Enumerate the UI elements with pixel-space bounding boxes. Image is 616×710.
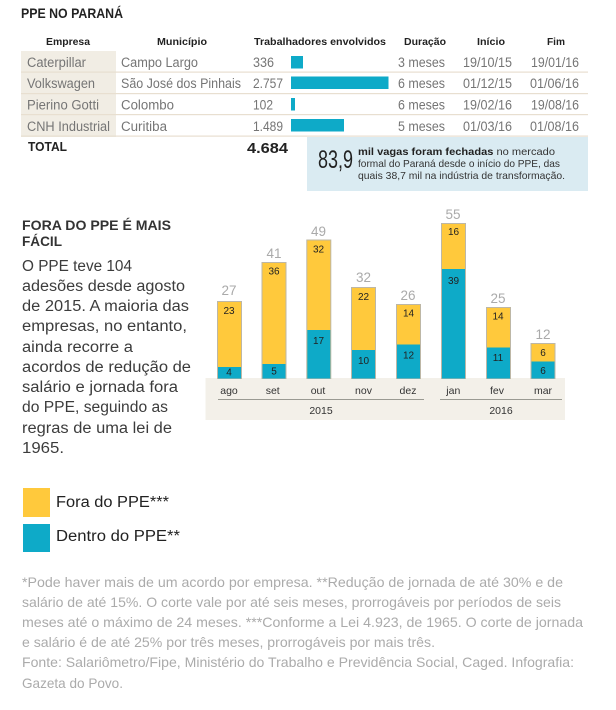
row: Volkswagen: 6 meses: [398, 76, 445, 91]
bar: nov: 22: [358, 292, 369, 303]
table header: Trabalhadores envolvidos: [254, 37, 386, 48]
row: Volkswagen: [27, 76, 579, 91]
row: Volkswagen: 01/06/16: [530, 76, 579, 91]
row: Caterpillar: 336: [253, 55, 274, 70]
callout: 83,9 mil vagas: formal do Paraná desde o início do PPE, das: [358, 158, 560, 170]
row: Pierino Gotti: Colombo: [121, 98, 174, 112]
table header: Fim: [547, 37, 565, 48]
row: Pierino Gotti: 19/08/16: [531, 98, 579, 112]
row: Pierino Gotti: 19/02/16: [463, 98, 512, 112]
bar: dez: 12: [403, 351, 414, 362]
bar: jan: [442, 207, 466, 378]
bar: set: 41: [266, 246, 282, 261]
row: Caterpillar: 3 meses: [398, 55, 445, 70]
legend: Dentro do PPE: Dentro do PPE**: [56, 528, 180, 545]
bar chart: acordos por mês: [206, 207, 565, 420]
legend: Fora do PPE: [23, 488, 169, 517]
bar: mar: 6: [540, 348, 546, 359]
row: Caterpillar: Caterpillar: [27, 55, 86, 70]
callout: 83,9 mil vagas: quais 38,7 mil na indústria de transformação.: [358, 170, 565, 182]
bar: out: [307, 224, 331, 378]
footnote and source: Fonte: Salariômetro/Fipe, Ministério do Trabalho e Previdência Social, Caged. Infografia:: [22, 654, 574, 670]
bar: ago: 27: [221, 283, 237, 298]
bar: fev: 25: [490, 291, 506, 306]
chart axis band: set: [266, 385, 280, 397]
bar: nov: 10: [358, 356, 369, 367]
text block: intro paragraph: do PPE, seguindo as: [22, 399, 168, 416]
bar: fev: 11: [493, 353, 504, 364]
chart axis band: mar: [534, 385, 553, 397]
row: Caterpillar: [27, 55, 579, 70]
legend: [23, 488, 180, 552]
bar: mar: [531, 327, 555, 378]
text block: intro paragraph: ainda recorre a: [22, 339, 133, 356]
table header: Município: [157, 37, 207, 48]
heading: Fora do PPE é mais fácil: [22, 217, 171, 249]
bar: ago: [218, 283, 242, 379]
row: Caterpillar: 19/10/15: [463, 55, 512, 70]
row: CNH Industrial: 01/03/16: [463, 119, 512, 134]
bar: set: 5: [271, 367, 277, 378]
bar: mar: 12: [535, 327, 551, 342]
bar: jan: 16: [448, 227, 459, 238]
row: Volkswagen: Volkswagen: [27, 76, 95, 91]
title: PPE no Paraná: PPE NO PARANÁ: [21, 5, 123, 21]
legend: Fora do PPE: Fora do PPE***: [56, 494, 169, 511]
text block: intro paragraph: de 2015. A maioria das: [22, 298, 189, 315]
text block: intro paragraph: 1965.: [22, 440, 64, 457]
row: CNH Industrial: 01/08/16: [530, 119, 579, 134]
table total: [28, 140, 289, 157]
chart axis band: nov: [355, 385, 373, 397]
footnote and source: meses até o máximo de 24 meses. ***Conforme a Lei 4.923, de 1965. O corte de jornada: [22, 614, 583, 630]
text block: intro paragraph: [22, 258, 191, 457]
callout: 83,9 mil vagas: [307, 137, 588, 191]
table total: 4.684: [247, 140, 289, 157]
bar: jan: 39: [448, 276, 459, 287]
table row backgrounds: [21, 51, 588, 137]
text block: intro paragraph: O PPE teve 104: [22, 258, 132, 275]
row: CNH Industrial: 5 meses: [398, 119, 445, 134]
footnote and source: e salário é de até 25% por três meses, prorrogáveis por mais três.: [22, 634, 435, 650]
bar: nov: [352, 270, 376, 378]
bar: ago: 23: [223, 306, 235, 317]
chart axis band: dez: [400, 385, 416, 397]
bar: fev: [486, 291, 510, 378]
table header: Empresa: [46, 37, 90, 48]
text block: intro paragraph: regras de uma lei de: [22, 420, 172, 437]
footnote and source: *Pode haver mais de um acordo por empresa. **Redução de jornada de até 30% e de: [22, 574, 563, 590]
text block: intro paragraph: empresas, no entanto,: [22, 318, 187, 335]
footnote and source: Gazeta do Povo.: [22, 675, 123, 691]
panel: table: [21, 37, 588, 157]
footnote and source: [22, 574, 583, 691]
table total: TOTAL: [28, 140, 67, 154]
chart axis band: ago: [220, 385, 238, 397]
footnote and source: salário de até 15%. O corte vale por até seis meses, prorrogáveis por períodos de seis: [22, 594, 561, 610]
row: Pierino Gotti: 102: [253, 98, 273, 112]
row: Volkswagen: 01/12/15: [463, 76, 512, 91]
heading: Fora do PPE é mais fácil: FÁCIL: [22, 233, 62, 249]
bar: dez: 14: [403, 309, 414, 320]
bar: dez: 26: [400, 288, 416, 303]
bar: out: 17: [313, 336, 324, 347]
text block: intro paragraph: salário e jornada fora: [22, 379, 178, 396]
bar: out: 49: [311, 224, 326, 239]
bar: ago: 4: [226, 368, 232, 379]
bar: set: [262, 246, 286, 378]
bar: fev: 14: [492, 312, 504, 323]
chart axis band: fev: [490, 385, 505, 397]
bar: jan: 55: [445, 207, 461, 222]
text block: intro paragraph: adesões desde agosto: [22, 278, 185, 295]
row: CNH Industrial: [27, 119, 579, 134]
table header: Início: [477, 37, 505, 48]
legend: Dentro do PPE: [23, 524, 180, 552]
callout: 83,9 mil vagas: mil vagas foram fechadas no mercado: [358, 146, 555, 158]
row: CNH Industrial: Curitiba: [121, 119, 167, 134]
heading: Fora do PPE é mais fácil: FORA DO PPE É MAIS: [22, 217, 171, 233]
bar: mar: 6: [540, 366, 546, 377]
bar: nov: 32: [356, 270, 371, 285]
callout: 83,9 mil vagas: 83,9: [318, 146, 353, 174]
chart axis band: out: [311, 385, 325, 397]
bar: dez: [396, 288, 420, 378]
row: CNH Industrial: 1.489: [253, 119, 283, 134]
row: Caterpillar: Campo Largo: [121, 55, 198, 70]
text block: intro paragraph: acordos de redução de: [22, 359, 191, 376]
chart axis band: 2016: [489, 405, 513, 417]
chart axis band: 2015: [309, 405, 333, 417]
row: Pierino Gotti: [27, 98, 579, 112]
row: Caterpillar: 19/01/16: [531, 55, 579, 70]
row: Pierino Gotti: Pierino Gotti: [27, 98, 99, 112]
row: Pierino Gotti: 6 meses: [398, 98, 445, 112]
bar: out: 32: [313, 245, 324, 256]
table header: [46, 37, 565, 48]
row: CNH Industrial: CNH Industrial: [27, 119, 110, 134]
row: Volkswagen: São José dos Pinhais: [121, 76, 241, 91]
table header: Duração: [404, 37, 446, 48]
row: Volkswagen: 2.757: [253, 76, 283, 91]
chart axis band: [206, 378, 565, 420]
chart axis band: jan: [445, 385, 460, 397]
bar: set: 36: [268, 267, 280, 278]
